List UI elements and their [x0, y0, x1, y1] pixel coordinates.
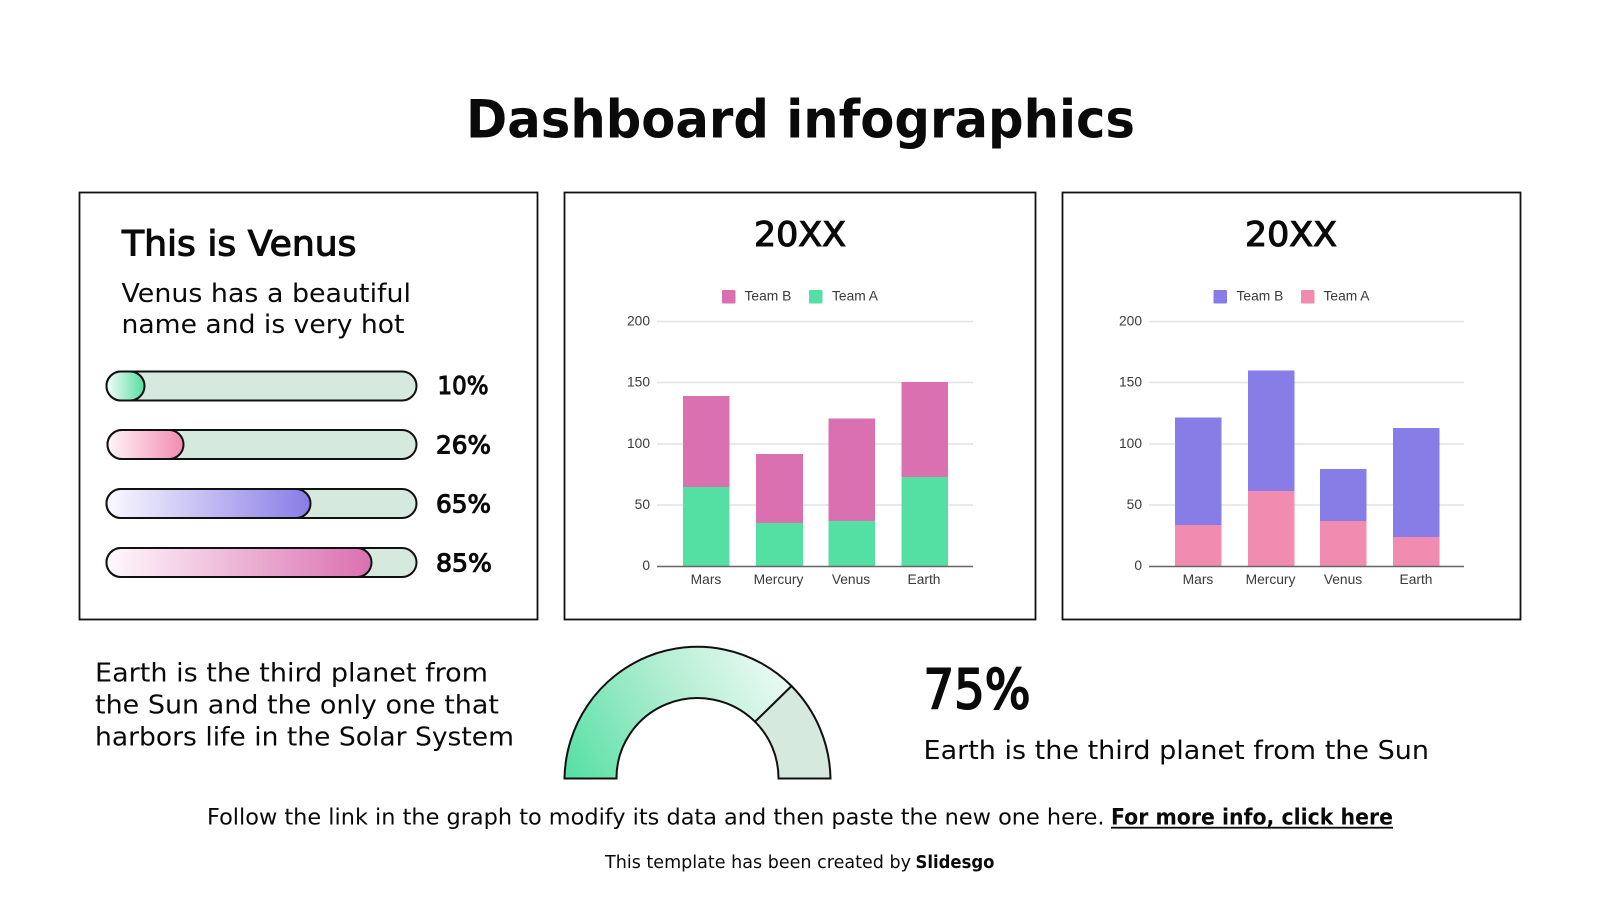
text block: Earth description: Earth is the third planet from — [95, 658, 488, 688]
panel: chart one — [564, 192, 1036, 620]
stacked bar chart: Venus — [832, 572, 870, 587]
text block: Earth description: harbors life in the Solar System — [95, 722, 514, 752]
stacked bar chart: Mars — [1183, 572, 1213, 587]
credit line: Slidesgo — [916, 853, 994, 873]
chart legend: Team A — [832, 288, 879, 304]
chart legend: Team A — [1324, 288, 1370, 304]
stacked bar chart: Mars — [691, 572, 721, 587]
stacked bar chart: Mercury — [754, 572, 804, 587]
stacked bar chart: 200 — [627, 314, 650, 328]
progress bar: 26% — [108, 430, 491, 460]
title: Dashboard infographics — [466, 90, 1135, 150]
chart heading: 20XX — [1245, 215, 1337, 255]
text block: Earth description: the Sun and the only one that — [95, 690, 499, 720]
panel: chart two — [1062, 192, 1520, 620]
stacked bar chart: 100 — [1119, 436, 1142, 451]
stacked bar chart: 150 — [627, 374, 650, 390]
text block: Earth description — [95, 658, 514, 752]
chart legend: Team B — [1236, 288, 1283, 304]
stacked bar chart: 50 — [1127, 497, 1142, 512]
stacked bar chart: 50 — [635, 497, 650, 512]
footer instruction with link: For more info, click here — [1111, 806, 1393, 830]
statistic: 75%: 75% — [924, 658, 1030, 721]
chart legend: Team B — [744, 288, 791, 304]
gauge chart 75% — [564, 647, 830, 778]
credit line: This template has been created by — [604, 853, 911, 873]
statistic caption: Earth is the third planet from the Sun — [924, 736, 1429, 766]
stacked bar chart — [1119, 314, 1464, 587]
progress bar: 26%: 26% — [436, 430, 491, 460]
stacked bar chart: 0 — [642, 558, 650, 573]
stacked bar chart: Earth — [908, 572, 940, 587]
chart legend — [1214, 288, 1370, 304]
progress bar: 65%: 65% — [436, 490, 491, 518]
panel description: name and is very hot — [122, 310, 404, 340]
progress bar: 85%: 85% — [436, 548, 492, 578]
panel description — [122, 279, 411, 340]
stacked bar chart — [627, 314, 973, 587]
progress bar: 65% — [106, 489, 491, 518]
progress bar: 10% — [106, 371, 488, 400]
chart legend — [722, 288, 879, 304]
progress bar: 85% — [106, 548, 492, 578]
chart heading: 20XX — [754, 215, 846, 255]
panel heading: This is Venus — [121, 224, 357, 264]
panel: Venus progress bars — [80, 192, 538, 620]
stacked bar chart: 100 — [627, 436, 650, 451]
stacked bar chart: Mercury — [1246, 572, 1296, 587]
progress bar: 10%: 10% — [438, 371, 488, 400]
stacked bar chart: 150 — [1119, 374, 1142, 390]
stacked bar chart: Venus — [1324, 572, 1362, 587]
footer instruction with link: Follow the link in the graph to modify its data and then paste the new one here. — [207, 806, 1104, 830]
stacked bar chart: 0 — [1134, 558, 1142, 573]
panel description: Venus has a beautiful — [122, 279, 411, 309]
stacked bar chart: 200 — [1119, 314, 1142, 328]
stacked bar chart: Earth — [1400, 572, 1432, 587]
